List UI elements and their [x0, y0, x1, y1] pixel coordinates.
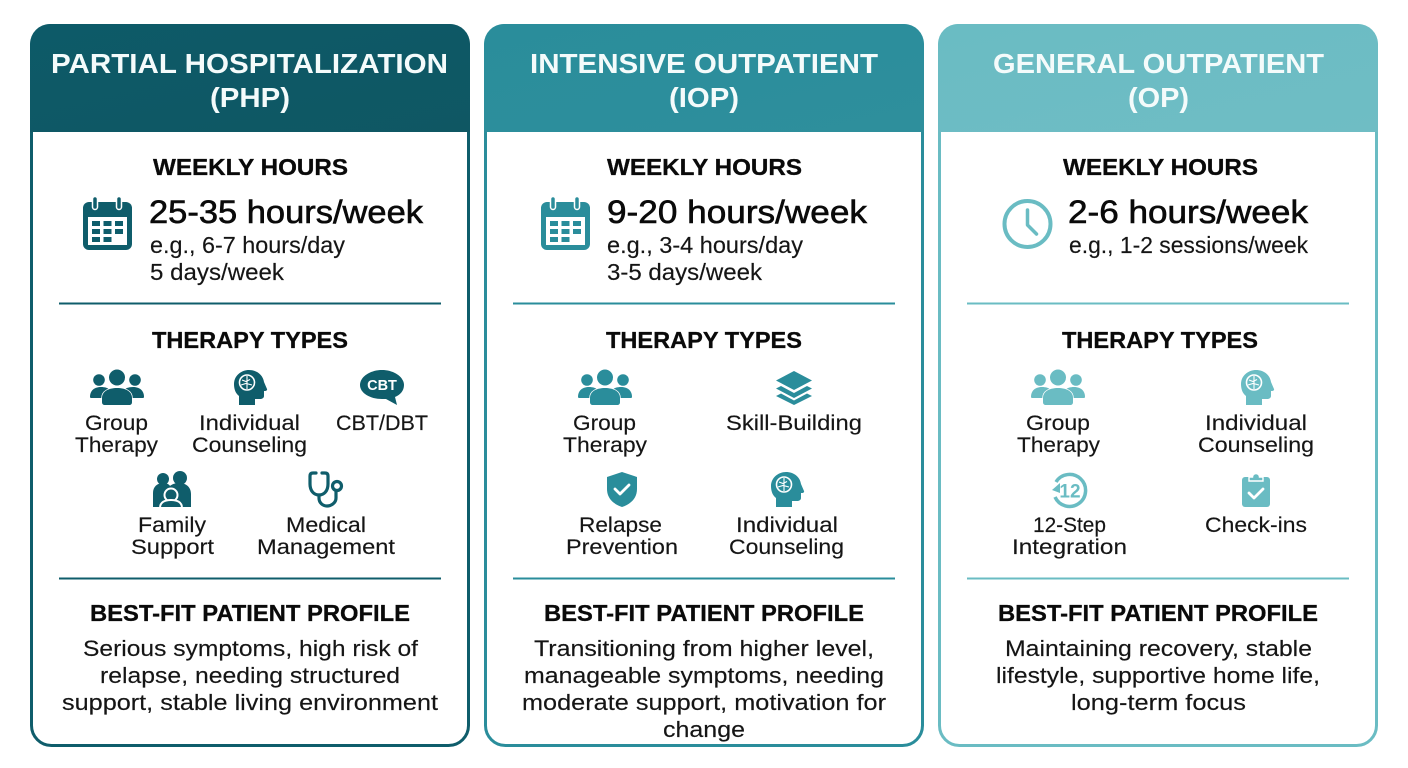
therapy: CBT/DBT: CBT: [367, 378, 397, 394]
patient profile text: lifestyle, supportive home life,: [996, 663, 1320, 688]
weekly hours value: 25-35 hours/week: [149, 194, 424, 230]
header band: OP: [938, 24, 1378, 132]
therapy: group therapy: [563, 370, 647, 457]
icon: calendar: [541, 196, 590, 250]
heading: IOP: INTENSIVE OUTPATIENT: [530, 48, 878, 79]
therapy: relapse prevention: Relapse: [579, 513, 662, 537]
therapy: CBT/DBT: [336, 370, 428, 435]
heading: best-fit patient profile: BEST-FIT PATIENT PROFILE: [998, 600, 1318, 626]
therapy: medical management: [257, 473, 395, 559]
therapy: individual counseling: Individual: [736, 513, 838, 537]
weekly hours value: 9-20 hours/week: [607, 194, 868, 230]
heading: OP: [993, 48, 1324, 113]
therapy: individual counseling: Counseling: [729, 535, 844, 559]
patient profile text: support, stable living environment: [62, 690, 439, 715]
therapy: medical management: Management: [257, 535, 395, 559]
panel: partial hospitalization: [30, 24, 470, 746]
therapy: group therapy: Therapy: [75, 433, 158, 457]
therapy: individual counseling: Counseling: [192, 433, 307, 457]
header band: IOP: [484, 24, 924, 132]
patient profile text: manageable symptoms, needing: [524, 663, 884, 688]
weekly hours example: 3-5 days/week: [607, 259, 763, 285]
therapy: check-ins: Check-ins: [1205, 513, 1307, 537]
weekly hours example: [150, 232, 345, 285]
therapy: CBT/DBT: CBT/DBT: [336, 411, 428, 435]
heading: therapy types: THERAPY TYPES: [1062, 327, 1258, 353]
therapy: group therapy: Group: [85, 411, 148, 435]
therapy: individual counseling: Individual: [1205, 411, 1307, 435]
weekly hours value: 2-6 hours/week: [1068, 194, 1309, 230]
therapy: skill-building: [726, 371, 862, 435]
heading: IOP: (IOP): [669, 82, 739, 113]
therapy: skill-building: Skill-Building: [726, 411, 862, 435]
heading: weekly hours: WEEKLY HOURS: [607, 154, 802, 180]
patient profile text: [522, 636, 887, 742]
patient profile text: Serious symptoms, high risk of: [83, 636, 419, 661]
heading: weekly hours: WEEKLY HOURS: [1063, 154, 1258, 180]
patient profile text: relapse, needing structured: [100, 663, 400, 688]
heading: therapy types: THERAPY TYPES: [606, 327, 802, 353]
heading: therapy types: THERAPY TYPES: [152, 327, 348, 353]
therapy: 12-step integration: [1012, 474, 1127, 559]
therapy: relapse prevention: Prevention: [566, 535, 678, 559]
icon: clock: [1004, 201, 1050, 247]
heading: PHP: [51, 48, 448, 113]
patient profile text: moderate support, motivation for: [522, 690, 887, 715]
therapy: individual counseling: Individual: [199, 411, 300, 435]
weekly hours example: e.g., 6-7 hours/day: [150, 232, 345, 258]
patient profile text: change: [663, 717, 745, 742]
patient profile text: Maintaining recovery, stable: [1005, 636, 1312, 661]
heading: best-fit patient profile: BEST-FIT PATIENT PROFILE: [90, 600, 410, 626]
heading: PHP: (PHP): [210, 82, 290, 113]
weekly hours example: e.g., 3-4 hours/day: [607, 232, 803, 258]
heading: IOP: [530, 48, 878, 113]
therapy: individual counseling: [1198, 370, 1314, 457]
heading: PHP: PARTIAL HOSPITALIZATION: [51, 48, 448, 79]
therapy: family support: Family: [138, 513, 206, 537]
therapy: family support: [131, 471, 214, 559]
weekly hours example: [607, 232, 803, 285]
therapy: 12-step integration: 12: [1059, 482, 1081, 502]
therapy: family support: Support: [131, 535, 214, 559]
patient profile text: long-term focus: [1071, 690, 1246, 715]
panel: general outpatient: [938, 24, 1378, 746]
therapy: 12-step integration: Integration: [1012, 535, 1127, 559]
patient profile text: [996, 636, 1320, 715]
therapy: medical management: Medical: [286, 513, 366, 537]
therapy: group therapy: Therapy: [563, 433, 647, 457]
therapy: relapse prevention: [566, 472, 678, 559]
therapy: check-ins: [1205, 474, 1307, 537]
heading: best-fit patient profile: BEST-FIT PATIENT PROFILE: [544, 600, 864, 626]
header band: PHP: [30, 24, 470, 132]
therapy: 12-step integration: 12-Step: [1033, 513, 1106, 537]
heading: OP: GENERAL OUTPATIENT: [993, 48, 1324, 79]
therapy: individual counseling: [192, 370, 307, 457]
heading: weekly hours: WEEKLY HOURS: [153, 154, 348, 180]
weekly hours example: 5 days/week: [150, 259, 285, 285]
icon: calendar: [83, 196, 132, 250]
therapy: group therapy: Group: [1026, 411, 1090, 435]
panel: intensive outpatient: [484, 24, 924, 746]
therapy: individual counseling: Counseling: [1198, 433, 1314, 457]
therapy: individual counseling: [729, 472, 844, 559]
therapy: group therapy: [75, 370, 158, 457]
therapy: group therapy: [1017, 370, 1100, 457]
therapy: group therapy: Therapy: [1017, 433, 1100, 457]
patient profile text: Transitioning from higher level,: [534, 636, 874, 661]
therapy: group therapy: Group: [573, 411, 636, 435]
weekly hours example: e.g., 1-2 sessions/week: [1069, 232, 1308, 258]
heading: OP: (OP): [1128, 82, 1189, 113]
patient profile text: [62, 636, 439, 715]
